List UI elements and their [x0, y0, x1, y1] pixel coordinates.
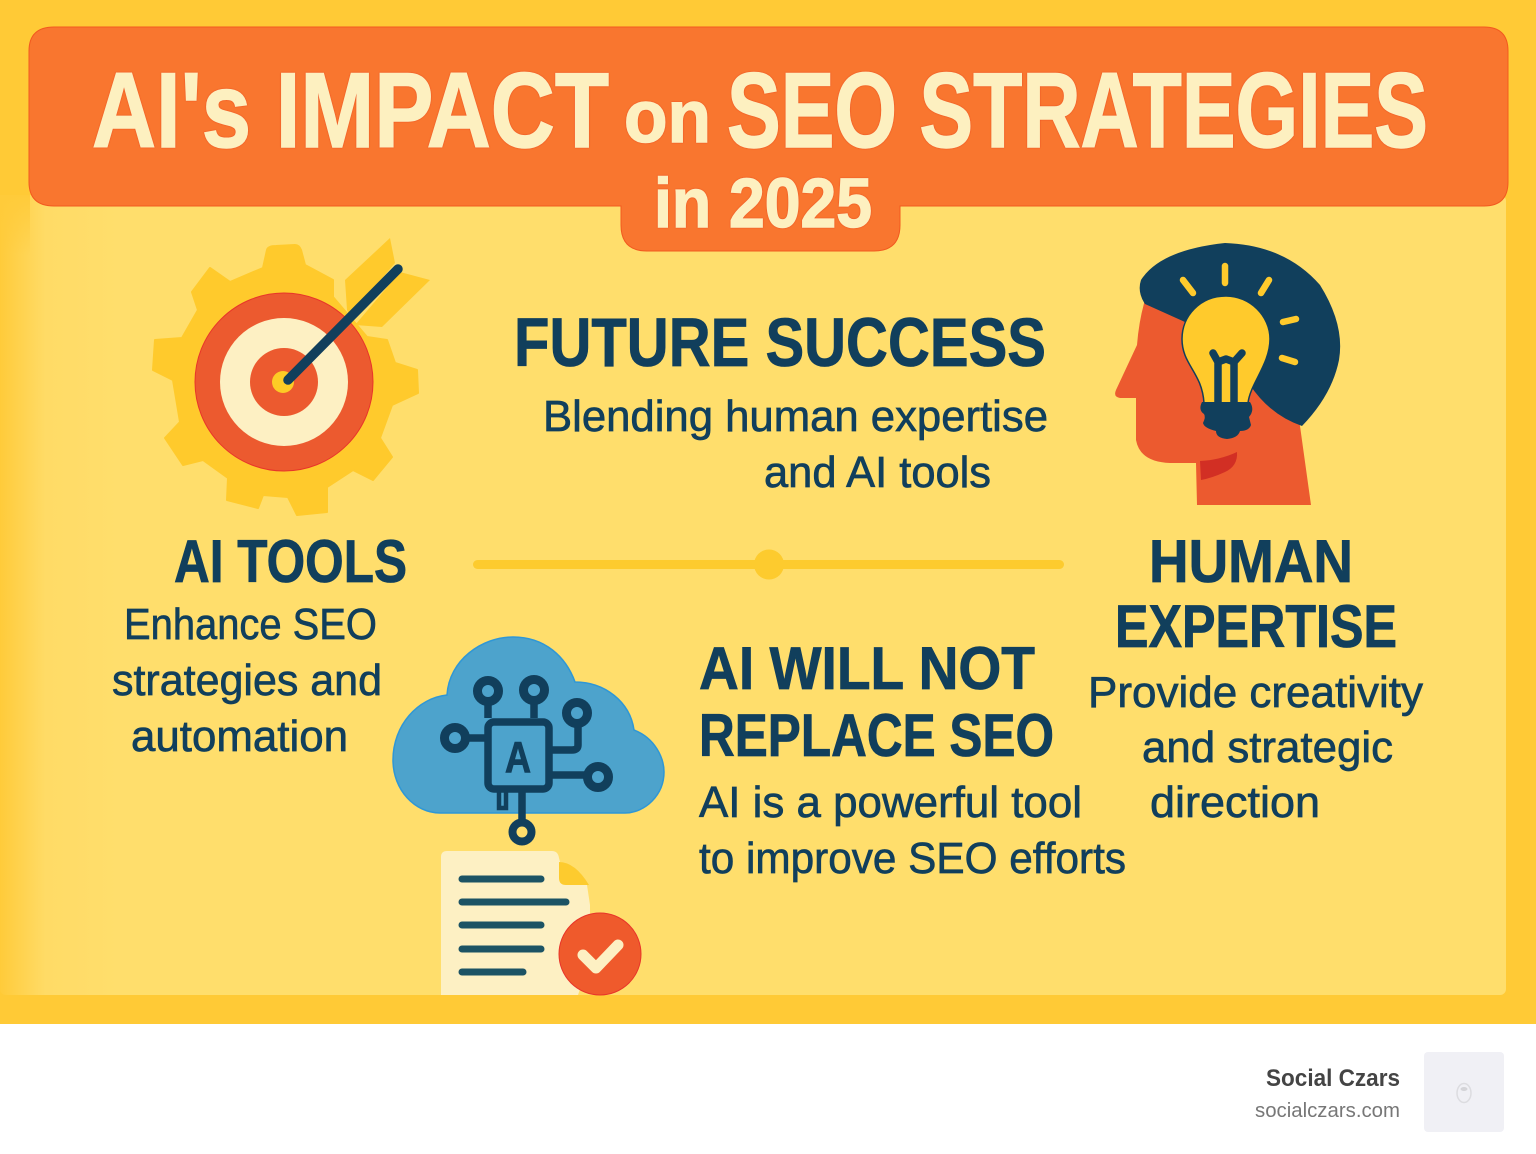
page fold [559, 862, 589, 885]
heading: AI tools: AI TOOLS [174, 528, 407, 595]
heading: AI will not replace SEO: AI WILL NOT [699, 635, 1035, 702]
heading: AI will not replace SEO [699, 635, 1054, 769]
footer logo tile [1424, 1052, 1504, 1132]
rays [1183, 266, 1296, 362]
bulb base [1200, 402, 1252, 439]
neck shadow [1200, 452, 1237, 480]
divider with center knob [473, 550, 1064, 580]
text: human expertise description: direction [1150, 778, 1320, 827]
text: AI will not replace SEO description: AI is a powerful tool [699, 778, 1082, 827]
icon: gear and target [153, 238, 430, 515]
footer url: socialczars.com [1255, 1100, 1400, 1122]
gear [153, 245, 418, 515]
text: AI tools description: Enhance SEO [124, 600, 377, 649]
title banner [29, 27, 1508, 251]
footer [1255, 1052, 1504, 1132]
chip letter: A [505, 733, 531, 782]
text: human expertise description [1088, 668, 1423, 827]
title: on [624, 75, 711, 158]
text: AI will not replace SEO description [699, 778, 1126, 883]
hair [1140, 243, 1340, 426]
arrow shaft [288, 269, 398, 380]
text: AI will not replace SEO description: to improve SEO efforts [699, 834, 1126, 883]
text: AI tools description: automation [131, 712, 348, 761]
heading: human expertise: EXPERTISE [1115, 593, 1397, 660]
heading: human expertise [1115, 528, 1397, 660]
footer brand name: Social Czars [1266, 1065, 1400, 1092]
filament [1213, 353, 1242, 403]
title [92, 50, 1428, 242]
heading: future success: FUTURE SUCCESS [514, 304, 1046, 381]
text lines [462, 879, 566, 972]
left edge fade [0, 195, 30, 255]
cloud [393, 637, 664, 813]
text: AI tools description [112, 600, 382, 761]
text: future success description: Blending human expertise [543, 392, 1048, 441]
text: human expertise description: Provide creativity [1088, 668, 1423, 717]
icon: AI cloud circuit [393, 637, 664, 842]
bulb [1182, 296, 1270, 403]
heading: human expertise: HUMAN [1149, 528, 1353, 595]
inner panel [0, 195, 1506, 995]
text: AI tools description: strategies and [112, 656, 382, 705]
head [1115, 300, 1311, 505]
title: in 2025 [654, 164, 872, 242]
icon: document with check [441, 851, 641, 995]
check badge [559, 913, 641, 995]
text: human expertise description: and strategic [1142, 723, 1393, 772]
title: AI's IMPACT [92, 50, 609, 170]
icon: head with light bulb [1115, 243, 1340, 505]
circuit [444, 680, 608, 842]
arrow fletching [345, 238, 430, 327]
text: future success description: and AI tools [764, 448, 991, 497]
target rings [195, 293, 373, 471]
page [441, 851, 590, 995]
text: future success description [543, 392, 1048, 497]
heading: AI will not replace SEO: REPLACE SEO [699, 702, 1054, 769]
